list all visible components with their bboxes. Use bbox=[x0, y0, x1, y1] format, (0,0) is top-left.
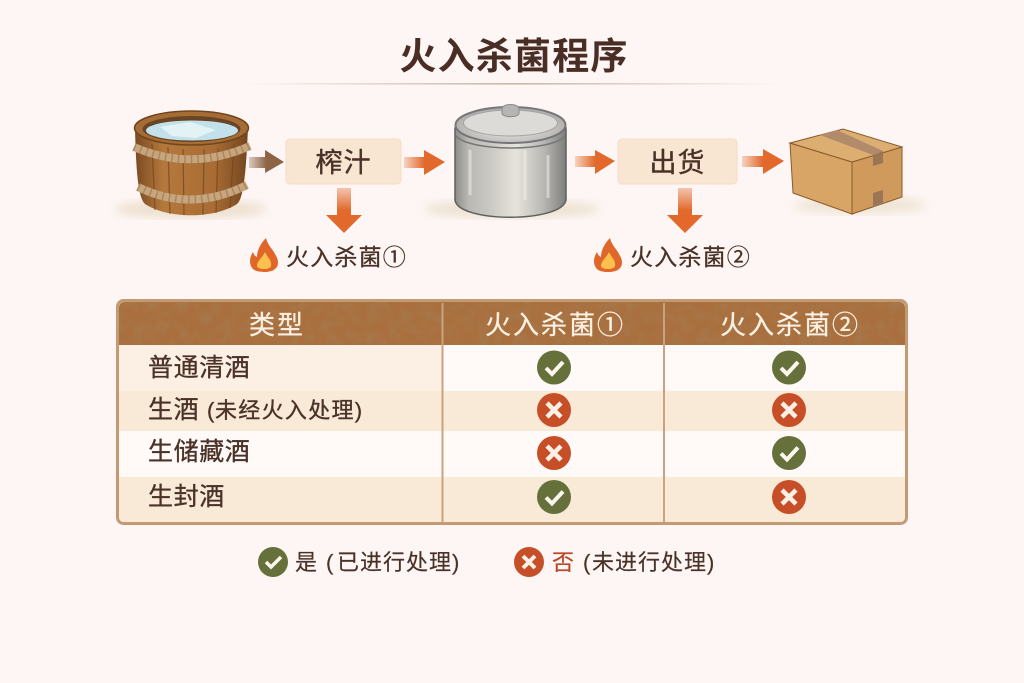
row: unpasteurized sake: 未经火入处理) bbox=[215, 398, 363, 423]
legend: yes: 已进行处理) bbox=[337, 550, 460, 575]
check icon bbox=[772, 350, 806, 384]
row: unpasteurized sake: 生酒 bbox=[148, 396, 199, 424]
row: stored raw sake bbox=[148, 436, 806, 470]
cross icon bbox=[772, 393, 806, 427]
title: 火入杀菌程序 bbox=[399, 36, 629, 77]
label: pasteurization 2: 火入杀菌② bbox=[630, 244, 751, 270]
row: regular sake bbox=[148, 350, 806, 384]
arrow: shipping down to pasteurization 2 bbox=[667, 188, 703, 233]
cross icon bbox=[772, 480, 806, 514]
row: sealed raw sake: 生封酒 bbox=[148, 483, 225, 511]
cross icon bbox=[537, 393, 571, 427]
row: unpasteurized sake: ( bbox=[207, 398, 215, 423]
icon: flame 1 bbox=[250, 238, 278, 272]
arrow: pressing down to pasteurization 1 bbox=[326, 188, 362, 233]
arrow: barrel to pressing bbox=[249, 150, 284, 173]
step box: shipping: 出货 bbox=[650, 148, 706, 178]
step box: pressing bbox=[286, 139, 401, 184]
row: stored raw sake: 生储藏酒 bbox=[148, 438, 250, 466]
column dividers bbox=[442, 303, 665, 522]
legend: no bbox=[514, 547, 715, 577]
legend bbox=[258, 547, 715, 577]
table header row: 火入杀菌① bbox=[485, 310, 625, 340]
comparison table bbox=[118, 300, 906, 524]
table frame bbox=[118, 300, 906, 524]
icon: wooden barrel bbox=[115, 111, 267, 218]
label: pasteurization 2 bbox=[594, 238, 751, 272]
step box: pressing: 榨汁 bbox=[316, 148, 372, 178]
arrow: tank to shipping bbox=[575, 150, 615, 174]
table header row: 类型 bbox=[249, 310, 305, 340]
table header row bbox=[119, 302, 905, 345]
row: sealed raw sake bbox=[148, 480, 806, 514]
legend: yes: ( bbox=[326, 550, 334, 575]
process flow bbox=[115, 104, 926, 272]
table header row: 火入杀菌② bbox=[720, 310, 860, 340]
row backgrounds bbox=[119, 345, 905, 522]
legend: no: 否 bbox=[552, 550, 574, 575]
row: unpasteurized sake bbox=[148, 393, 806, 427]
label: pasteurization 1 bbox=[250, 238, 407, 272]
legend: yes: 是 bbox=[295, 550, 318, 575]
cross icon bbox=[537, 436, 571, 470]
legend: yes bbox=[258, 547, 460, 577]
icon: cardboard box bbox=[790, 129, 926, 214]
arrow: shipping to box bbox=[742, 149, 784, 174]
label: pasteurization 1: 火入杀菌① bbox=[286, 244, 407, 270]
row: regular sake: 普通清酒 bbox=[148, 354, 250, 382]
infographic canvas bbox=[116, 37, 924, 577]
legend: no: ( bbox=[583, 550, 591, 575]
arrow: pressing to tank bbox=[404, 150, 445, 175]
icon: flame 2 bbox=[594, 238, 622, 272]
legend: no: 未进行处理) bbox=[592, 550, 715, 575]
check icon bbox=[537, 480, 571, 514]
check icon bbox=[772, 436, 806, 470]
step box: shipping bbox=[618, 139, 737, 184]
icon: steel tank bbox=[424, 104, 600, 218]
check icon bbox=[537, 350, 571, 384]
